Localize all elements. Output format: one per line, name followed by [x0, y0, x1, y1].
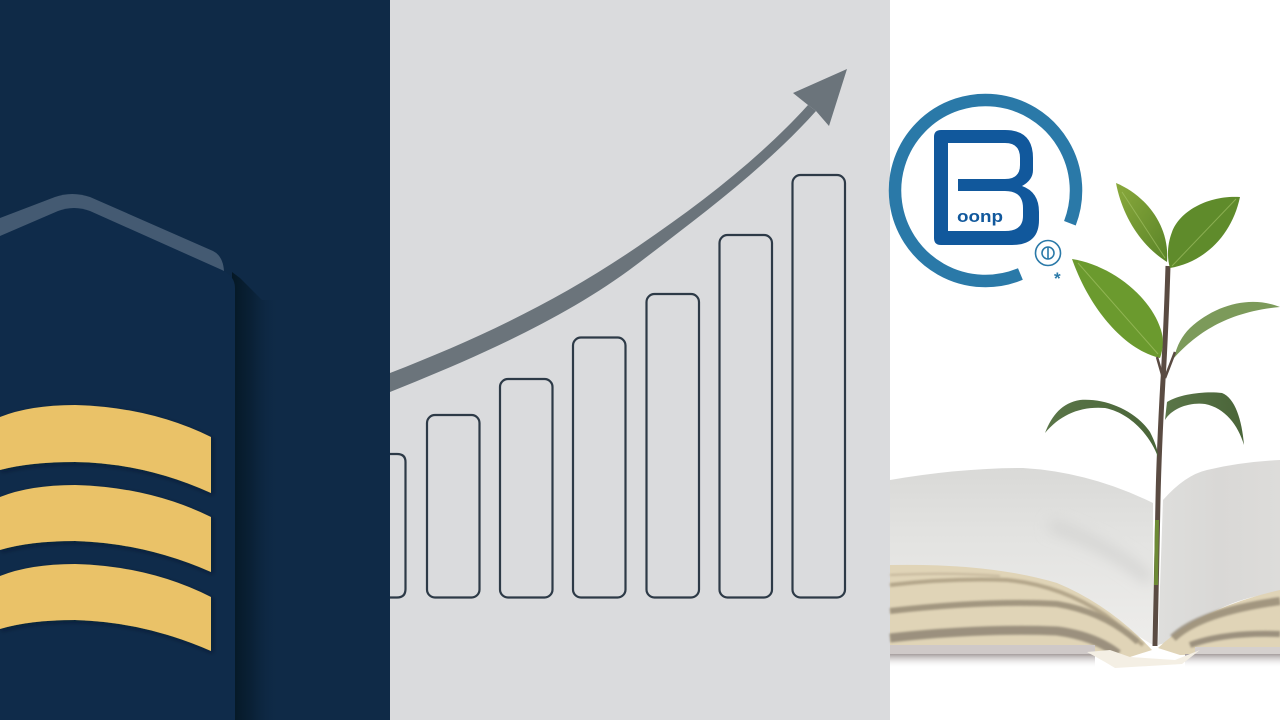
icon: seedling — [1045, 183, 1280, 646]
icon: book — [890, 460, 1280, 668]
logo small mark — [1036, 240, 1060, 266]
leaf middle left — [1072, 259, 1163, 358]
gold stripe three — [0, 564, 211, 651]
leaf midribs — [1078, 192, 1236, 354]
leaf right slender — [1174, 302, 1280, 358]
book shadow — [890, 654, 1095, 668]
book spine — [1087, 650, 1200, 668]
bar chart — [390, 175, 845, 598]
leaf top right — [1168, 197, 1240, 268]
leaf lower right — [1165, 392, 1244, 445]
logo — [895, 100, 1076, 288]
book left page edges — [890, 565, 1152, 657]
seedling stem — [1155, 266, 1168, 646]
insignia side shadow — [232, 272, 280, 720]
seedling branches — [1157, 352, 1175, 378]
insignia chevron rim — [0, 194, 224, 271]
leaf top left — [1116, 183, 1167, 262]
panel: navy insignia — [0, 0, 390, 720]
panel: growth chart — [390, 0, 890, 720]
book right page edges — [1158, 590, 1280, 655]
book left page — [890, 468, 1153, 645]
logo letter B — [934, 130, 1039, 245]
gold stripes — [0, 405, 211, 651]
logo wordmark: oonp — [957, 207, 1003, 226]
arrow: growth trend — [390, 69, 847, 392]
gold stripe one — [0, 405, 211, 493]
book left page crease — [1050, 525, 1150, 580]
insignia body — [0, 208, 235, 720]
gold stripe two — [0, 485, 211, 572]
book right page — [1158, 460, 1280, 645]
logo ring — [895, 100, 1076, 281]
panel: book and seedling — [890, 0, 1280, 720]
leaf lower left — [1045, 400, 1158, 457]
logo asterisk: * — [1054, 269, 1061, 288]
